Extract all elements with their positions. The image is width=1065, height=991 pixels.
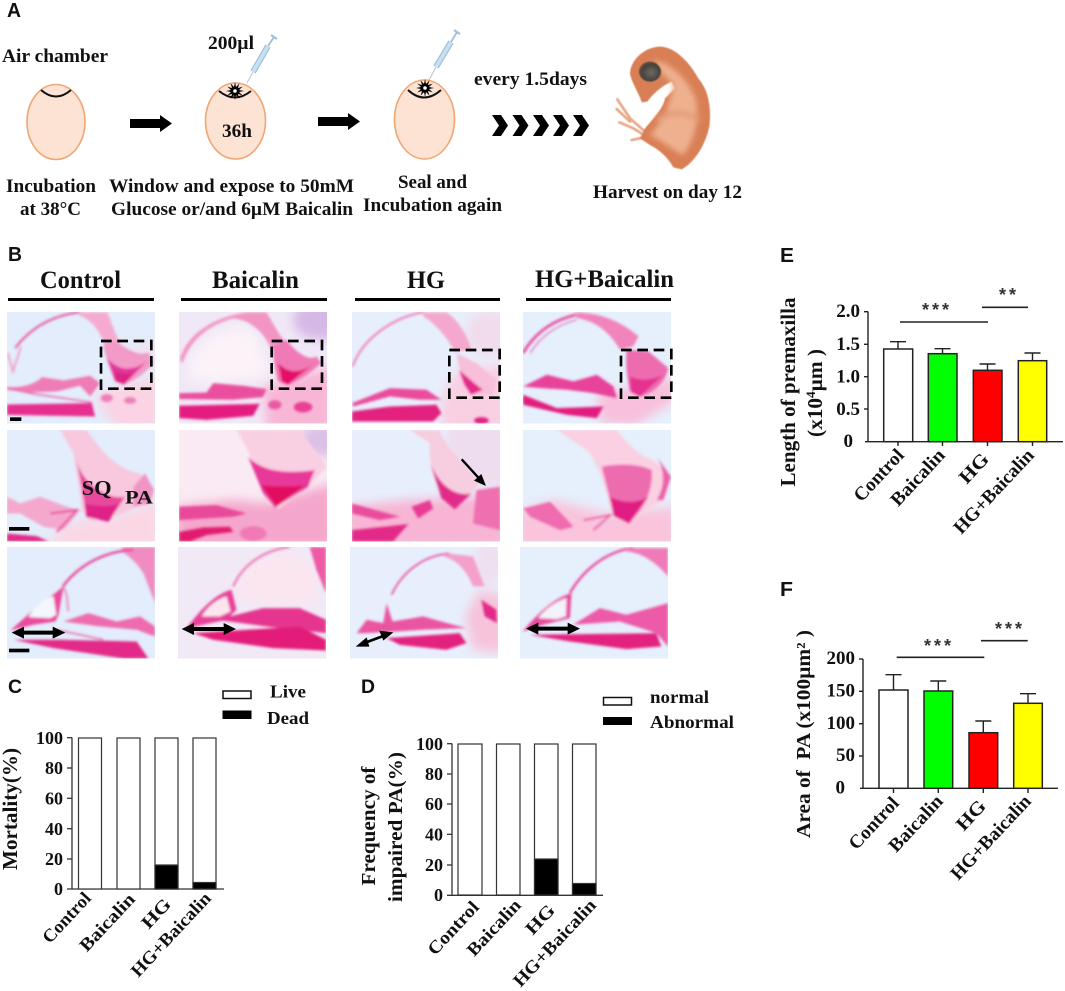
panel C: mortality chart bbox=[0, 677, 309, 981]
harvest caption: Harvest on day 12 bbox=[593, 182, 742, 203]
window caption: Window and expose to 50mM bbox=[109, 176, 354, 197]
significance E: ** bbox=[999, 285, 1019, 305]
y ticks E bbox=[836, 301, 860, 452]
micrograph baicalin top bbox=[179, 312, 327, 424]
y ticks C: 80 bbox=[45, 758, 63, 778]
y ticks F: 0 bbox=[836, 778, 845, 798]
x labels F: Control bbox=[845, 793, 904, 854]
seal caption: Incubation again bbox=[363, 195, 502, 216]
egg 3 sealed bbox=[394, 79, 454, 159]
egg 2 with window bbox=[206, 82, 266, 159]
y ticks F: 100 bbox=[826, 713, 855, 734]
SQ PA labels bbox=[82, 476, 153, 508]
x labels F: HG bbox=[952, 796, 991, 835]
x labels C: Baicalin bbox=[75, 889, 139, 955]
x labels E: Baicalin bbox=[887, 445, 950, 511]
syringe 1 bbox=[247, 35, 277, 83]
dose label: 200µl bbox=[208, 33, 254, 54]
overlays: dashed boxes, arrows, scale bars, labels bbox=[9, 341, 322, 652]
y axis title D: Frequency of bbox=[358, 766, 380, 886]
seal caption: Seal and bbox=[398, 172, 467, 193]
y ticks F: 200 bbox=[826, 648, 855, 669]
arrow HG zoom bbox=[462, 459, 486, 486]
y ticks C: 100 bbox=[36, 728, 63, 748]
y ticks E: 0.5 bbox=[836, 399, 860, 420]
window caption bbox=[109, 176, 354, 220]
legend C: Live bbox=[270, 682, 306, 702]
y ticks C: 40 bbox=[45, 819, 63, 839]
panel E: premaxilla length chart bbox=[776, 245, 1063, 538]
column headers: Baicalin bbox=[212, 267, 299, 294]
y ticks D: 80 bbox=[425, 764, 443, 784]
micrograph HG+Baicalin whole head bbox=[520, 547, 668, 658]
label D: D bbox=[361, 677, 375, 698]
micrograph HG+Baicalin zoom bbox=[523, 430, 671, 542]
y ticks F: 150 bbox=[826, 680, 855, 702]
significance F: *** bbox=[995, 619, 1025, 639]
y ticks D: 100 bbox=[416, 734, 443, 754]
double arrow control bbox=[12, 627, 65, 639]
y ticks C bbox=[36, 728, 63, 899]
label A: A bbox=[7, 0, 21, 22]
dashed box control bbox=[101, 341, 151, 389]
error bars F bbox=[886, 675, 1036, 733]
arrow 1 bbox=[130, 115, 172, 132]
seal caption bbox=[363, 172, 502, 216]
x labels D: HG+Baicalin bbox=[509, 895, 600, 991]
x labels D bbox=[423, 895, 600, 991]
air chamber label: Air chamber bbox=[2, 46, 109, 67]
y ticks D bbox=[416, 734, 443, 905]
micrograph HG whole head bbox=[350, 547, 498, 658]
x labels C: Control bbox=[38, 888, 95, 947]
y axis title D bbox=[358, 752, 407, 902]
y axis title E: 4 bbox=[803, 391, 818, 398]
y ticks E: 0 bbox=[844, 431, 853, 452]
dashed box baicalin bbox=[272, 341, 322, 389]
double arrow HG+Baicalin bbox=[526, 623, 580, 635]
window caption: Glucose or/and 6µM Baicalin bbox=[111, 199, 353, 220]
column headers bbox=[8, 266, 674, 301]
y axis title F: Area of PA (x100µm² ) bbox=[793, 630, 815, 838]
legend D: Abnormal bbox=[650, 712, 734, 732]
y ticks E: 1.5 bbox=[836, 334, 860, 355]
micrograph control zoom bbox=[7, 430, 155, 542]
micrograph control whole head bbox=[7, 547, 155, 658]
SQ PA labels: PA bbox=[125, 487, 153, 508]
legend C: Dead bbox=[267, 708, 309, 728]
y ticks F: 50 bbox=[836, 745, 855, 766]
axes C bbox=[67, 738, 224, 889]
label B: B bbox=[8, 244, 22, 266]
column headers: Control bbox=[40, 267, 121, 294]
x labels F: HG+Baicalin bbox=[947, 791, 1036, 884]
bars F bbox=[879, 690, 1042, 788]
micrograph HG+Baicalin top bbox=[523, 312, 671, 424]
bars E bbox=[884, 349, 1047, 442]
label C: C bbox=[8, 677, 22, 698]
y ticks D: 60 bbox=[425, 794, 443, 814]
micrograph baicalin whole head bbox=[178, 547, 326, 658]
egg 1 bbox=[27, 84, 85, 160]
legend D bbox=[603, 687, 734, 732]
chevrons bbox=[492, 115, 589, 136]
scale bars bbox=[9, 417, 29, 652]
x labels D: HG bbox=[521, 900, 559, 939]
dashed box HG bbox=[449, 350, 500, 398]
y axis title E: (x10 bbox=[803, 398, 827, 437]
chick embryo bbox=[617, 47, 710, 169]
y axis title E: µm ) bbox=[803, 349, 827, 391]
y ticks E: 2.0 bbox=[836, 301, 860, 322]
36h label: 36h bbox=[222, 121, 252, 142]
label E: E bbox=[780, 245, 794, 267]
x labels E: Control bbox=[850, 445, 909, 506]
axes E bbox=[864, 312, 1063, 446]
x labels C: HG bbox=[137, 894, 175, 933]
x labels C: HG+Baicalin bbox=[127, 888, 215, 981]
label F: F bbox=[780, 579, 793, 601]
panel D: impaired PA frequency chart bbox=[358, 677, 734, 991]
significance F bbox=[897, 619, 1028, 657]
x labels D: Baicalin bbox=[463, 895, 525, 960]
micrograph HG top bbox=[352, 312, 500, 424]
significance E bbox=[900, 285, 1028, 322]
y ticks E: 1.0 bbox=[836, 366, 860, 388]
y ticks D: 20 bbox=[425, 855, 443, 875]
micrograph HG zoom bbox=[352, 430, 500, 542]
frequency label: every 1.5days bbox=[474, 69, 587, 90]
x labels C bbox=[38, 888, 215, 981]
x labels E bbox=[850, 445, 1039, 538]
y ticks D: 0 bbox=[434, 885, 443, 905]
double arrow baicalin bbox=[182, 623, 236, 635]
x labels E: HG bbox=[955, 449, 994, 488]
bars C bbox=[78, 738, 216, 889]
x labels F: Baicalin bbox=[885, 791, 948, 857]
y ticks C: 60 bbox=[45, 788, 63, 808]
incubation caption: Incubation bbox=[6, 176, 96, 197]
y ticks C: 0 bbox=[54, 879, 63, 899]
legend D: normal bbox=[650, 687, 709, 707]
significance F: *** bbox=[924, 636, 954, 656]
axes D bbox=[447, 744, 603, 895]
panel A: experimental timeline bbox=[2, 0, 742, 220]
arrow 2 bbox=[318, 113, 360, 130]
double arrow HG bbox=[356, 631, 393, 647]
bars D bbox=[458, 744, 596, 895]
y axis title E: Length of premaxilla bbox=[776, 297, 800, 486]
panel F: PA area chart bbox=[780, 579, 1058, 884]
y ticks C: 20 bbox=[45, 849, 63, 869]
y axis title E bbox=[776, 297, 827, 486]
significance E: *** bbox=[922, 300, 952, 320]
syringe 2 bbox=[429, 30, 460, 80]
panel B: skull stain micrographs bbox=[7, 244, 677, 658]
x labels D: Control bbox=[423, 897, 483, 959]
axes F bbox=[859, 659, 1058, 793]
SQ PA labels: SQ bbox=[82, 476, 112, 500]
y axis title D: impaired PA(%) bbox=[385, 752, 407, 902]
x labels F bbox=[845, 791, 1036, 884]
error bars E bbox=[890, 342, 1040, 370]
micrograph baicalin zoom bbox=[179, 430, 327, 542]
legend C bbox=[222, 682, 309, 728]
y ticks F bbox=[826, 648, 855, 798]
column headers: HG bbox=[407, 267, 445, 294]
incubation caption bbox=[6, 176, 96, 220]
incubation caption: at 38°C bbox=[20, 199, 81, 220]
micrograph control top bbox=[7, 312, 155, 424]
dashed box HG+Baicalin bbox=[621, 350, 671, 398]
column headers: HG+Baicalin bbox=[535, 266, 674, 293]
x labels E: HG+Baicalin bbox=[950, 445, 1039, 538]
y ticks D: 40 bbox=[425, 824, 443, 844]
